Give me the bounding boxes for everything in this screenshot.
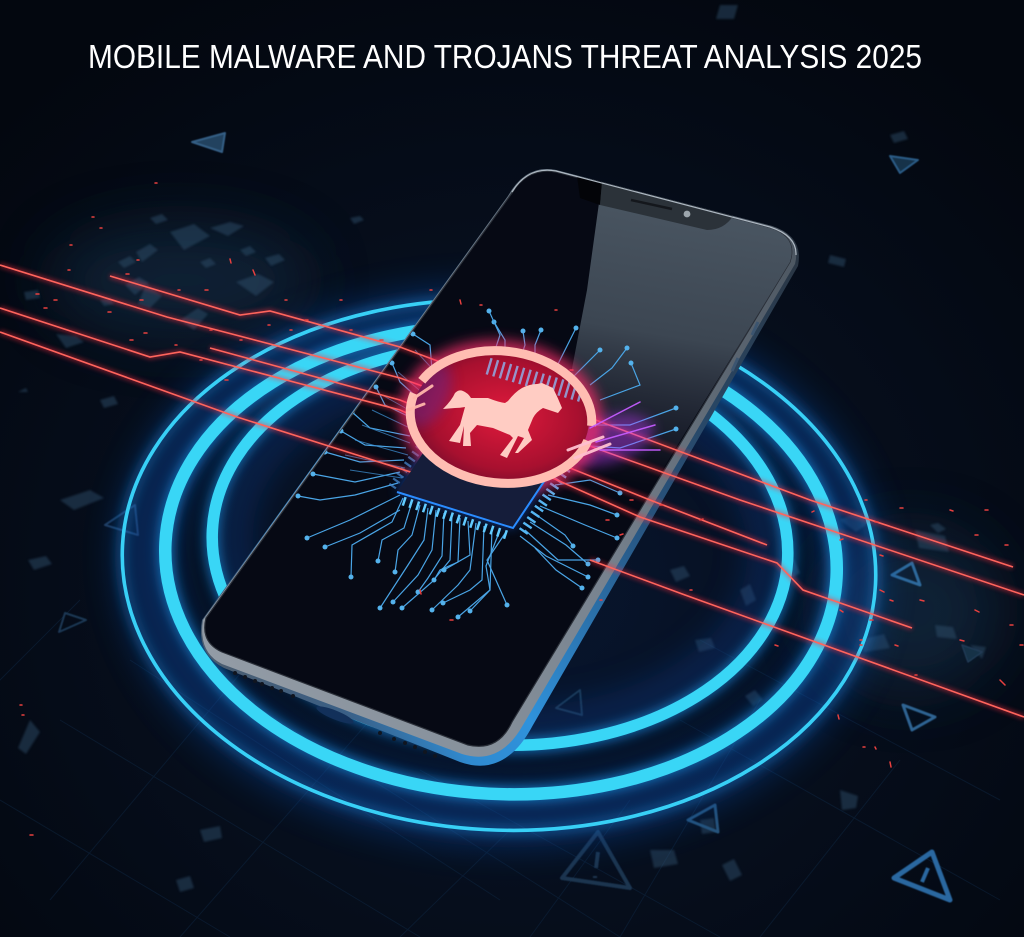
inner ring xyxy=(202,330,798,760)
chip right pins xyxy=(523,466,568,532)
phone body edge: metal rim xyxy=(202,169,796,757)
inner halo xyxy=(223,349,777,741)
red disc xyxy=(407,344,595,490)
ring halo xyxy=(133,298,867,834)
notch xyxy=(600,182,733,230)
badge ring xyxy=(404,342,598,492)
warning icon: top right xyxy=(890,156,918,173)
glitch streaks xyxy=(408,386,660,458)
traces: left parallel bundle xyxy=(345,350,438,478)
notch shadow xyxy=(577,176,602,205)
traces: left xyxy=(298,334,432,500)
circuit traces xyxy=(298,311,676,617)
warning icon: left xyxy=(105,505,138,535)
top bezel highlight xyxy=(512,170,796,255)
perspective grid xyxy=(0,600,1000,937)
warning icon: large bottom right xyxy=(894,852,950,900)
middle ring xyxy=(153,309,849,811)
chip glow xyxy=(392,450,551,534)
outer ring xyxy=(109,281,889,849)
warning icon: bottom centre xyxy=(688,805,718,832)
traces: bottom xyxy=(307,495,507,617)
warning triangles xyxy=(59,133,982,900)
red data streams xyxy=(0,265,1024,717)
traces: right xyxy=(489,311,676,588)
chip bottom pins xyxy=(403,501,510,536)
side buttons xyxy=(732,322,758,371)
badge glow xyxy=(403,341,599,493)
background haze xyxy=(50,225,1000,690)
warning icon: top left xyxy=(192,133,225,152)
phone screen xyxy=(205,171,792,746)
warning icon: large bottom centre xyxy=(562,832,630,888)
speaker holes and port xyxy=(233,671,437,758)
warning icon: right xyxy=(892,563,920,585)
phone body edge: outer rim xyxy=(201,169,799,766)
warning icon: lower right xyxy=(903,705,935,730)
magenta flare xyxy=(550,404,660,476)
stream lines xyxy=(0,265,1024,717)
concentric neon rings xyxy=(109,281,889,849)
screen glare xyxy=(572,184,792,464)
title: MOBILE MALWARE AND TROJANS THREAT ANALYSIS 2025 xyxy=(88,38,922,75)
upper-left glitch haze xyxy=(414,364,456,430)
icon: horse xyxy=(443,383,562,458)
red sparks xyxy=(20,183,1023,835)
stream glow xyxy=(0,265,1024,717)
phone xyxy=(201,169,799,766)
ring glow xyxy=(109,281,889,849)
front camera xyxy=(684,211,690,217)
chip body xyxy=(397,384,585,528)
chip lit edge xyxy=(397,420,585,528)
warning icon: lower left xyxy=(59,613,86,632)
warning icon: faint right xyxy=(962,645,982,662)
speaker slot xyxy=(631,200,672,209)
trojan badge xyxy=(397,341,660,528)
chip top pins xyxy=(414,358,580,430)
warning icon: under phone xyxy=(556,690,582,715)
chip left pins xyxy=(388,446,420,490)
